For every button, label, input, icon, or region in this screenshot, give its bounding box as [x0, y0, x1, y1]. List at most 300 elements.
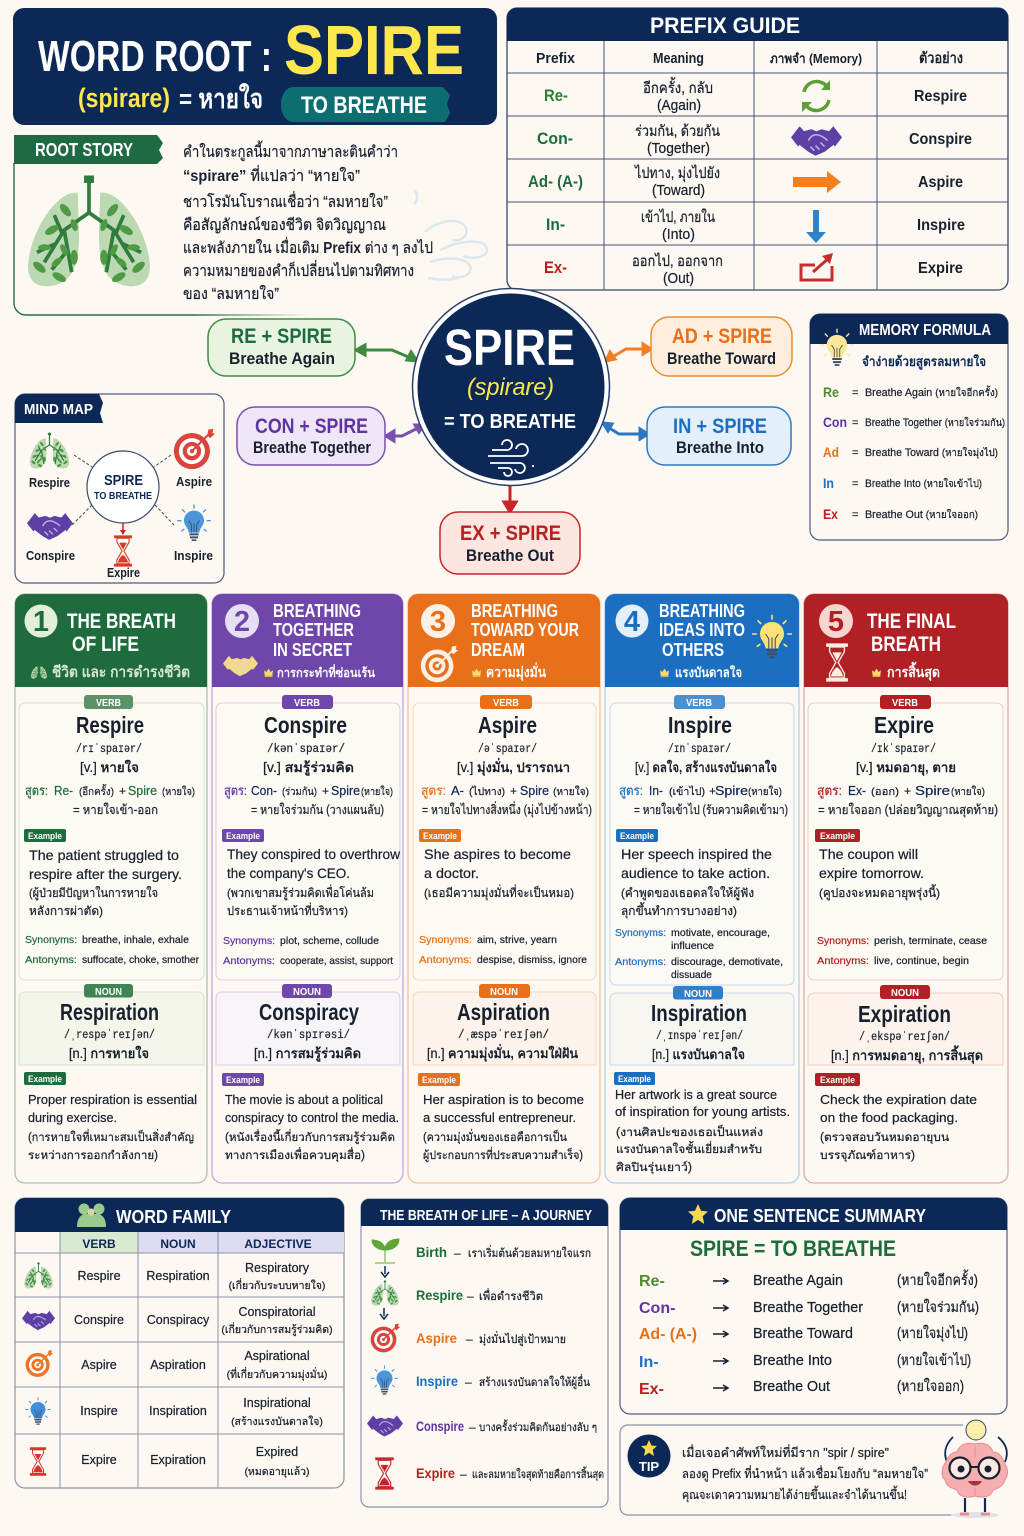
noun card: conspiracy: Example	[226, 1075, 260, 1086]
column 3: aspire family	[408, 594, 600, 1183]
step: inspire: –	[465, 1375, 472, 1389]
row: Con-: ร่วมกัน, ด้วยกัน	[635, 123, 720, 140]
noun card: expiration: (ตรวจสอบวันหมดอายุบน	[820, 1132, 949, 1144]
noun card: respiration: Proper respiration is essential	[28, 1092, 197, 1107]
noun card: aspiration: ผู้ประกอบการที่ประสบความสำเร็จ)	[423, 1147, 583, 1162]
noun card: respiration: (การหายใจที่เหมาะสมเป็นสิ่งสำคัญ	[28, 1129, 194, 1144]
tab: mind map: MIND MAP	[24, 401, 93, 418]
formula rows: Breathe Again (หายใจอีกครั้ง)	[865, 385, 998, 399]
icon: handshake	[791, 126, 842, 156]
summary rows: Re-	[639, 1273, 665, 1290]
verb card: conspire: cooperate, assist, support	[280, 955, 393, 967]
verb card: inspire: ลุกขึ้นทำการบางอย่าง)	[621, 902, 737, 919]
noun card: respiration	[19, 984, 204, 1162]
row: In-: Inspire	[917, 217, 965, 234]
verb card: conspire: Spire	[331, 783, 360, 798]
step: birth: เราเริ่มต้นด้วยลมหายใจแรก	[468, 1245, 591, 1260]
summary rows: In-	[639, 1354, 659, 1371]
row: In-: เข้าไป, ภายใน	[641, 208, 715, 226]
row: expire	[30, 1445, 310, 1478]
node: AD + SPIRE	[651, 317, 792, 376]
verb card: conspire: = หายใจร่วมกัน (วางแผนลับ)	[251, 803, 384, 817]
row: Ad-: ไปทาง, มุ่งไปยัง	[634, 164, 720, 183]
header: breathing ideas into others: BREATHING	[659, 600, 745, 621]
row: Ad-: Ad- (A-)	[528, 172, 583, 191]
arrow: respire to aspire	[380, 1308, 388, 1319]
noun card: inspiration: (งานศิลปะของเธอเป็นแหล่ง	[616, 1124, 763, 1139]
header: the final breath: BREATH	[871, 633, 941, 656]
formula rows: Breathe Out (หายใจออก)	[865, 509, 978, 521]
noun card: expiration: on the food packaging.	[820, 1110, 958, 1125]
noun card: inspiration: [n.] แรงบันดาลใจ	[652, 1046, 745, 1062]
noun card: conspiracy: [n.] การสมรู้ร่วมคิด	[254, 1046, 361, 1062]
verb card: expire: Example	[820, 831, 855, 842]
arrow: in	[603, 423, 648, 439]
node: CON + SPIRE: CON + SPIRE	[255, 415, 368, 438]
verb card: conspire: สูตร:	[224, 783, 247, 799]
row: conspire	[22, 1305, 333, 1336]
verb card: respire: +	[119, 784, 126, 798]
verb card: conspire: Con-	[251, 783, 277, 798]
verb card: expire: Spire	[915, 783, 950, 798]
summary rows: (หายใจเข้าไป)	[897, 1351, 971, 1369]
noun card: inspiration: Example	[618, 1074, 651, 1085]
verb card: expire: +	[904, 784, 911, 798]
verb card: conspire: (หายใจ)	[361, 785, 393, 798]
header: breathing ideas into others: IDEAS INTO	[659, 619, 745, 640]
verb card: aspire: a doctor.	[424, 865, 479, 881]
column headings: NOUN	[160, 1237, 196, 1251]
icon: leafy lungs	[28, 175, 150, 286]
verb card: expire: Antonyms:	[817, 955, 869, 967]
verb card: aspire: Aspire	[478, 712, 537, 738]
row: inspire: (สร้างแรงบันดาลใจ)	[231, 1415, 323, 1428]
panel: tip	[620, 1420, 1008, 1518]
verb card: conspire: They conspired to overthrow	[227, 846, 401, 862]
verb card: expire: The coupon will	[819, 846, 918, 862]
verb card: inspire: Example	[620, 831, 654, 842]
verb card: expire	[808, 695, 1003, 980]
verb card: conspire: /kənˈspaɪər/	[267, 743, 345, 756]
central hub: SPIRE: SPIRE	[444, 319, 575, 376]
text: root story: และพลังภายใน เมื่อเติม Prefix ต่าง ๆ ลงไป	[183, 237, 433, 257]
noun card: expiration: [n.] การหมดอายุ, การสิ้นสุด	[831, 1045, 983, 1064]
heading: summary: ONE SENTENCE SUMMARY	[714, 1206, 926, 1226]
column headings: VERB	[82, 1237, 116, 1251]
step: inspire: สร้างแรงบันดาลใจให้ผู้อื่น	[479, 1374, 590, 1389]
row: Ex-: (Out)	[663, 270, 694, 287]
verb card: aspire: (ไปทาง)	[469, 785, 505, 798]
summary rows: Con-	[639, 1300, 675, 1317]
node: AD + SPIRE: Breathe Toward	[667, 349, 776, 368]
node: EX + SPIRE	[440, 512, 580, 574]
header: the breath of life: OF LIFE	[72, 633, 139, 656]
verb card: respire: Spire	[128, 783, 157, 798]
noun card: aspiration: Example	[422, 1075, 456, 1086]
verb card: inspire: Inspire	[668, 712, 732, 738]
noun card: inspiration: ศิลปินรุ่นเยาว์)	[616, 1160, 692, 1174]
summary rows: Breathe Into	[753, 1353, 832, 1369]
header: breathing ideas into others: OTHERS	[662, 639, 724, 660]
formula rows: =	[852, 478, 858, 490]
verb card: inspire: สูตร:	[619, 783, 643, 799]
arrow: con	[386, 425, 424, 441]
verb card: expire: Synonyms:	[817, 935, 869, 947]
header: the breath of life: ชีวิต และ การดำรงชีวิต	[52, 663, 190, 681]
noun card: expiration	[808, 985, 1003, 1162]
row: Re-	[544, 77, 967, 114]
panel: mind map	[15, 394, 224, 583]
row: expire: Expired	[256, 1445, 298, 1459]
mind map: conspire	[26, 513, 75, 563]
row: aspire: (ที่เกี่ยวกับความมุ่งมั่น)	[227, 1367, 327, 1381]
icon: breath swirl	[414, 190, 487, 280]
row: Con-: (Together)	[647, 140, 710, 157]
verb card: respire: (ผู้ป่วยมีปัญหาในการหายใจ	[29, 886, 158, 901]
formula rows: =	[852, 387, 858, 399]
icon: blue down arrow	[806, 210, 826, 243]
header: breathing together in secret	[212, 594, 403, 687]
header: the breath of life	[15, 594, 207, 687]
formula rows: =	[852, 447, 858, 459]
node: RE + SPIRE: RE + SPIRE	[231, 325, 332, 348]
verb card: aspire: Synonyms:	[419, 934, 472, 946]
row: Re-: Respire	[914, 88, 967, 105]
step: conspire: Conspire	[416, 1418, 464, 1434]
node: AD + SPIRE: AD + SPIRE	[672, 325, 772, 348]
row: Re-: อีกครั้ง, กลับ	[643, 77, 713, 97]
panel: one sentence summary	[620, 1198, 1007, 1414]
row: inspire	[26, 1396, 323, 1428]
formula rows: In	[823, 475, 834, 491]
noun card: conspiracy: /kənˈspɪrəsi/	[267, 1029, 350, 1042]
row: aspire: Aspiration	[150, 1358, 206, 1372]
row: Ad-: (Toward)	[652, 182, 705, 199]
formula rows: Ad	[823, 444, 839, 460]
noun card: conspiracy: ทางการเมืองเพื่อควบคุมสื่อ)	[225, 1147, 365, 1162]
verb card: respire: = หายใจเข้า-ออก	[73, 803, 158, 817]
verb card: respire: Respire	[76, 712, 144, 738]
step: aspire	[371, 1324, 566, 1352]
row: Ex-: ออกไป, ออกจาก	[632, 252, 723, 270]
ribbon: to breathe	[281, 87, 450, 122]
noun card: aspiration: [n.] ความมุ่งมั่น, ความใฝ่ฝัน	[427, 1043, 579, 1062]
text: tip: คุณจะเดาความหมายได้ง่ายขึ้นและจำได้นานขึ้น!	[682, 1485, 907, 1503]
connectors: prefix arrows	[356, 344, 651, 512]
panel: prefix guide table	[507, 8, 1008, 290]
verb card: conspire: Synonyms:	[223, 935, 275, 947]
header: breathing together in secret: BREATHING	[273, 600, 361, 621]
row: Con-: Conspire	[909, 131, 972, 148]
noun card: respiration: Example	[28, 1074, 62, 1085]
noun card: expiration: Expiration	[858, 1001, 951, 1027]
verb card: respire: suffocate, choke, smother	[82, 954, 199, 966]
node: RE + SPIRE: Breathe Again	[229, 349, 335, 368]
verb card: expire: Expire	[874, 712, 934, 738]
step: respire: –	[467, 1289, 474, 1303]
heading: word family: WORD FAMILY	[116, 1207, 231, 1227]
verb card: inspire: (คำพูดของเธอดลใจให้ผู้ฟัง	[621, 886, 754, 901]
verb card: expire: live, continue, begin	[874, 955, 969, 967]
step: expire: –	[460, 1467, 467, 1481]
ribbon: to breathe: TO BREATHE	[301, 92, 427, 119]
verb card: respire	[19, 695, 204, 980]
row: inspire: Inspire	[80, 1404, 118, 1418]
verb card: respire: สูตร:	[25, 783, 48, 799]
row: Re-: (Again)	[657, 97, 701, 114]
verb card: respire: Example	[28, 831, 62, 842]
verb card: aspire: (เธอมีความมุ่งมั่นที่จะเป็นหมอ)	[424, 884, 574, 901]
row: Ex-	[544, 252, 963, 287]
noun card: inspiration: Her artwork is a great source	[615, 1087, 777, 1102]
summary rows: Breathe Out	[753, 1379, 830, 1395]
node: IN + SPIRE: Breathe Into	[676, 438, 764, 457]
verb card: aspire: (หายใจ)	[553, 785, 589, 798]
step: expire	[375, 1457, 604, 1490]
verb card: aspire: Example	[423, 831, 457, 842]
ribbon: root story: ROOT STORY	[35, 140, 133, 160]
summary rows: Breathe Again	[753, 1273, 843, 1289]
text: tip	[682, 1444, 928, 1503]
verb card: inspire: Spire	[715, 783, 748, 798]
central hub: SPIRE: = TO BREATHE	[444, 411, 576, 433]
mind map: aspire	[174, 429, 215, 489]
header: the final breath: การสิ้นสุด	[887, 661, 940, 681]
row: Re-: Re-	[544, 86, 568, 105]
verb card: conspire: Conspire	[264, 712, 347, 738]
mind map: aspire: Aspire	[176, 475, 212, 489]
formula rows: Breathe Toward (หายใจมุ่งไป)	[865, 447, 998, 459]
header: breathing toward your dream	[408, 594, 600, 687]
row: Ex-: Expire	[918, 260, 963, 277]
text: root story: ของ “ลมหายใจ”	[183, 285, 279, 303]
header: breathing toward your dream: BREATHING	[471, 600, 558, 621]
row: aspire: Aspirational	[244, 1349, 310, 1363]
verb card: inspire: influence	[671, 940, 714, 952]
verb card: inspire: /ɪnˈspaɪər/	[668, 743, 731, 756]
arrow: re	[356, 345, 417, 361]
subtitle: spirare: (spirare)	[78, 83, 170, 113]
verb card: conspire: Example	[226, 831, 260, 842]
noun card: conspiracy: The movie is about a political	[225, 1092, 383, 1107]
row: aspire: Aspire	[81, 1358, 117, 1372]
arrow: ex	[504, 486, 516, 512]
arrow: ad	[606, 344, 651, 361]
verb card: respire: (หายใจ)	[162, 785, 195, 798]
noun card: aspiration	[413, 984, 596, 1162]
node: IN + SPIRE	[647, 407, 791, 465]
node: CON + SPIRE: Breathe Together	[253, 438, 371, 457]
verb card: respire: Antonyms:	[25, 954, 77, 966]
summary rows	[639, 1269, 979, 1398]
noun card: expiration: บรรจุภัณฑ์อาหาร)	[820, 1148, 915, 1162]
node: RE + SPIRE	[208, 319, 355, 376]
step: inspire: Inspire	[416, 1373, 458, 1389]
noun card: aspiration: Aspiration	[457, 999, 550, 1025]
noun card: expiration: NOUN	[891, 987, 919, 999]
noun card: conspiracy: Conspiracy	[259, 999, 359, 1025]
verb card: respire: VERB	[96, 697, 121, 709]
verb card: aspire: สูตร:	[421, 783, 446, 799]
row: In-: (Into)	[662, 226, 695, 243]
row: Con-	[537, 123, 972, 157]
row: conspire: (เกี่ยวกับการสมรู้ร่วมคิด)	[221, 1322, 333, 1336]
header: breathing toward your dream: TOWARD YOUR	[471, 619, 579, 640]
noun card: respiration: Respiration	[60, 999, 159, 1025]
verb card: aspire: VERB	[493, 697, 519, 709]
verb card: expire: perish, terminate, cease	[874, 935, 987, 947]
column headings: ADJECTIVE	[244, 1237, 312, 1251]
verb card: expire: Ex-	[848, 783, 866, 798]
noun card: respiration: /ˌrespəˈreɪʃən/	[64, 1029, 155, 1042]
verb card: expire: [v.] หมดอายุ, ตาย	[856, 760, 956, 776]
verb card: expire: สูตร:	[817, 783, 842, 799]
verb card: expire: VERB	[892, 697, 918, 709]
text: root story: คำในตระกูลนี้มาจากภาษาละตินคำว่า	[183, 140, 398, 162]
verb card: respire: Re-	[54, 783, 73, 798]
verb card: expire: /ɪkˈspaɪər/	[871, 743, 936, 756]
row: respire: Respire	[77, 1269, 121, 1283]
row: Ad-	[528, 164, 963, 199]
verb card: conspire: ประธานเจ้าหน้าที่บริหาร)	[227, 902, 348, 918]
header: the final breath: 5	[828, 606, 844, 638]
node: EX + SPIRE: Breathe Out	[466, 546, 554, 565]
step: respire: Respire	[416, 1287, 463, 1303]
step: birth: –	[454, 1246, 461, 1260]
verb card: conspire: Antonyms:	[223, 955, 275, 967]
mind map: respire: Respire	[29, 476, 70, 490]
column headings	[82, 1237, 312, 1251]
row: expire: Expire	[81, 1453, 117, 1467]
header: breathing together in secret: TOGETHER	[273, 619, 354, 640]
verb card: aspire: Antonyms:	[419, 954, 472, 966]
column 2: conspire family	[212, 594, 403, 1183]
noun card: inspiration: NOUN	[684, 988, 712, 1000]
heading: memory formula: MEMORY FORMULA	[859, 322, 991, 339]
noun card: expiration: /ˌekspəˈreɪʃən/	[859, 1031, 950, 1044]
verb card: inspire: [v.] ดลใจ, สร้างแรงบันดาลใจ	[635, 759, 777, 775]
verb card: aspire	[413, 695, 596, 980]
central hub: SPIRE: (spirare)	[467, 374, 554, 401]
verb card: aspire: despise, dismiss, ignore	[477, 954, 587, 966]
formula rows: Breathe Into (หายใจเข้าไป)	[865, 478, 982, 490]
verb card: inspire: discourage, demotivate,	[671, 956, 783, 968]
header: breathing ideas into others: แรงบันดาลใจ	[675, 664, 742, 680]
verb card: respire: [v.] หายใจ	[80, 759, 139, 775]
noun card: inspiration	[610, 986, 794, 1174]
row: respire: (เกี่ยวกับระบบหายใจ)	[229, 1278, 325, 1292]
verb card: inspire: (เข้าไป)	[669, 785, 705, 798]
mind map center	[87, 451, 159, 523]
mind map: respire	[29, 433, 70, 490]
verb card: conspire: (ร่วมกัน)	[282, 786, 317, 798]
subtitle: meaning: = หายใจ	[179, 83, 263, 114]
formula: spire: SPIRE = TO BREATHE	[690, 1236, 896, 1261]
noun card: conspiracy	[216, 984, 400, 1162]
verb card: aspire: +	[510, 784, 517, 798]
column 5: expire family	[804, 594, 1008, 1183]
badge: tip	[628, 1434, 670, 1478]
formula rows: =	[852, 509, 858, 521]
step: birth: Birth	[416, 1244, 447, 1260]
heading: word root: WORD ROOT :	[38, 32, 272, 81]
node: CON + SPIRE	[237, 407, 385, 465]
verb card: inspire: Her speech inspired the	[621, 846, 772, 862]
noun card: conspiracy: (หนังเรื่องนี้เกี่ยวกับการสมรู้ร่วมคิด	[225, 1129, 395, 1144]
header: breathing together in secret: 2	[234, 606, 250, 638]
formula rows: =	[852, 417, 858, 429]
header: breathing together in secret: การกระทำที่ซ่อนเร้น	[277, 664, 375, 680]
verb card: inspire	[610, 695, 794, 985]
verb card: respire: /rɪˈspaɪər/	[76, 743, 142, 756]
icon: cycle arrows	[802, 80, 830, 112]
row: expire: Expiration	[150, 1453, 206, 1467]
mind map center: TO BREATHE	[94, 490, 152, 502]
summary rows: Breathe Together	[753, 1300, 863, 1316]
verb card: aspire: aim, strive, yearn	[477, 934, 557, 946]
summary rows: Ad- (A-)	[639, 1326, 697, 1343]
column 4: inspire family	[605, 594, 799, 1183]
verb card: inspire: Antonyms:	[615, 956, 666, 968]
row: aspire	[26, 1349, 327, 1381]
noun card: aspiration: a successful entrepreneur.	[423, 1110, 576, 1125]
icon: wind	[488, 440, 534, 476]
header: breathing toward your dream: ความมุ่งมั่น	[486, 662, 546, 681]
step: inspire	[371, 1366, 590, 1395]
summary rows: Ex-	[639, 1381, 664, 1398]
verb card: respire: (อีกครั้ง)	[79, 784, 114, 798]
arrow: birth to respire	[381, 1266, 389, 1277]
noun card: aspiration: /ˌæspəˈreɪʃən/	[458, 1029, 549, 1042]
verb card: inspire: Synonyms:	[615, 927, 666, 939]
text: root story: ชาวโรมันโบราณเชื่อว่า “ลมหายใจ”	[183, 191, 388, 211]
verb card: aspire: [v.] มุ่งมั่น, ปรารถนา	[457, 757, 570, 776]
text: root story	[183, 140, 433, 303]
text: tip: ลองดู Prefix ที่นำหน้า แล้วเชื่อมโยงกับ “ลมหายใจ”	[682, 1465, 928, 1482]
table header row: Meaning	[653, 50, 704, 67]
verb card: conspire: plot, scheme, collude	[280, 935, 379, 947]
noun card: respiration: NOUN	[95, 986, 122, 998]
header: breathing together in secret: IN SECRET	[273, 639, 353, 660]
header: breathing ideas into others: 4	[624, 606, 640, 638]
panel: memory formula	[810, 314, 1008, 540]
verb card: expire: (หายใจ)	[951, 785, 985, 798]
step: conspire: –	[469, 1420, 476, 1434]
verb card: aspire: She aspires to become	[424, 846, 571, 862]
row: In-: In-	[546, 215, 565, 234]
header: the breath of life: THE BREATH	[67, 610, 176, 633]
heading: prefix guide: PREFIX GUIDE	[650, 13, 800, 38]
row: respire: Respiratory	[245, 1261, 310, 1275]
verb card: respire: respire after the surgery.	[29, 866, 182, 882]
header: breathing toward your dream: 3	[430, 606, 446, 638]
verb card: respire: Synonyms:	[25, 934, 77, 946]
verb card: conspire: +	[322, 784, 329, 798]
verb card: expire: (คูปองจะหมดอายุพรุ่งนี้)	[819, 884, 940, 901]
verb card: aspire: A-	[451, 783, 464, 798]
formula rows: Con	[823, 414, 847, 430]
verb card: inspire: motivate, encourage,	[671, 927, 770, 939]
text: root story: คือสัญลักษณ์ของชีวิต จิตวิญญาณ	[183, 216, 386, 234]
tab: mind map	[15, 394, 103, 423]
verb card: inspire: +	[709, 784, 716, 798]
summary rows: Breathe Toward	[753, 1326, 853, 1342]
noun card: inspiration: Inspiration	[651, 1000, 747, 1026]
verb card: inspire: In-	[649, 783, 663, 798]
verb card: inspire: dissuade	[671, 969, 712, 981]
row: expire: (หมดอายุแล้ว)	[244, 1466, 310, 1478]
verb card: expire: (ออก)	[871, 786, 899, 798]
